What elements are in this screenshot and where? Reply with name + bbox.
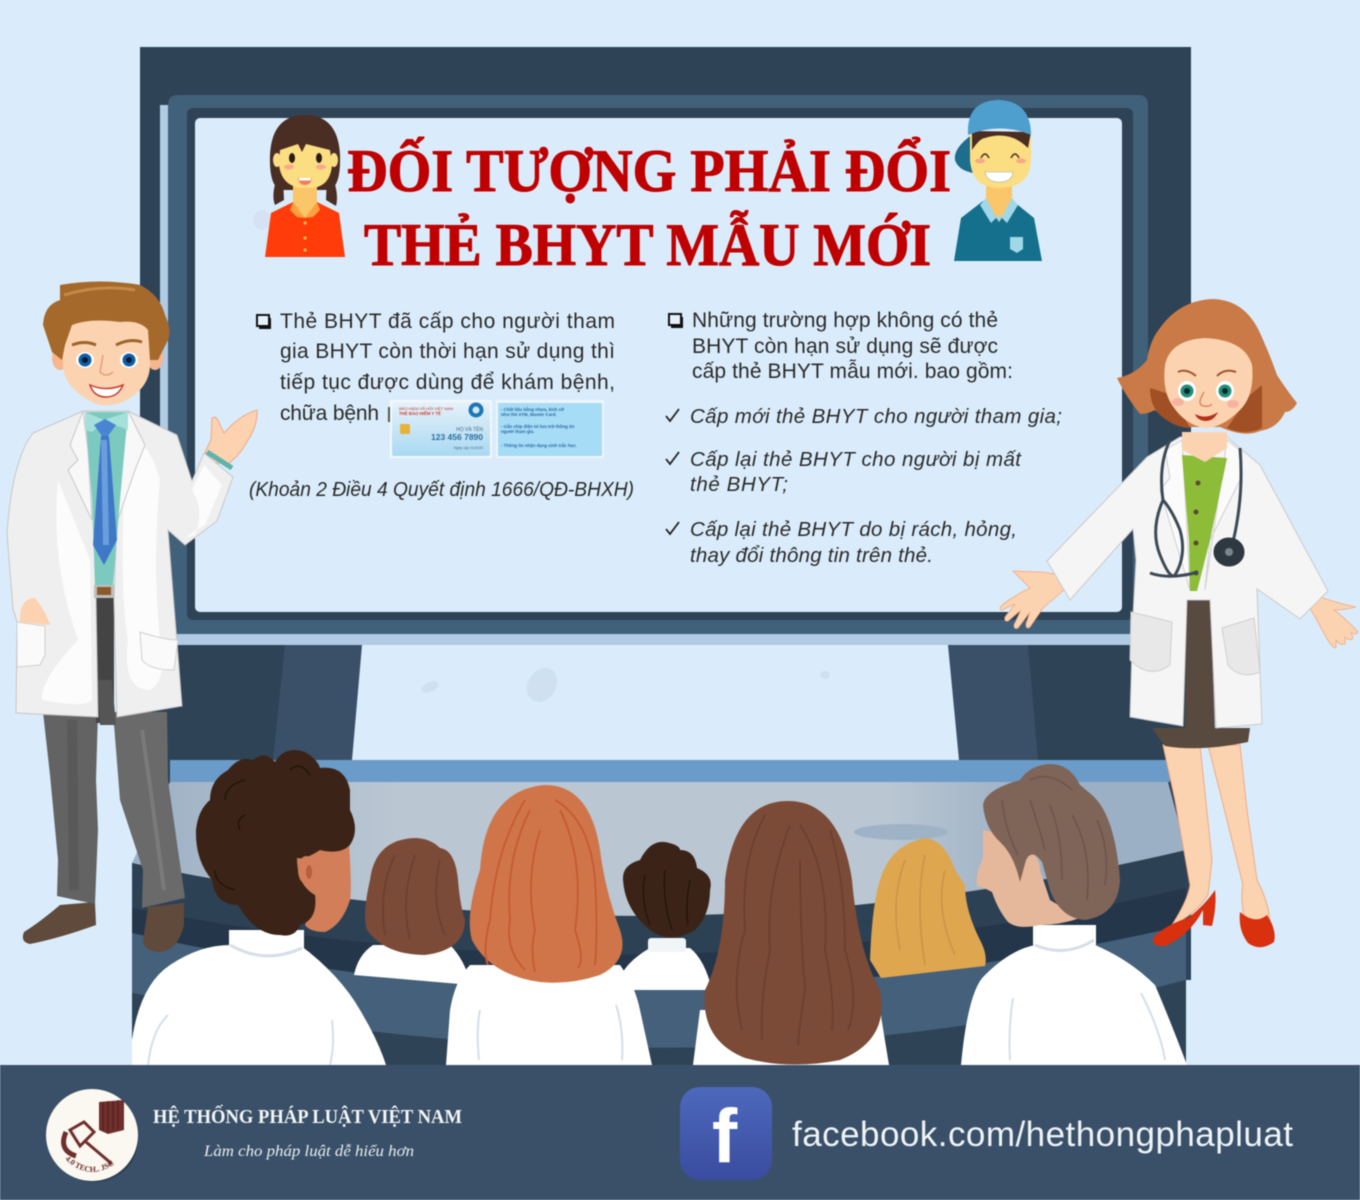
- intro paragraph: cấp thẻ BHYT mẫu mới. bao gồm:: [692, 360, 1013, 383]
- legal citation: (Khoản 2 Điều 4 Quyết định 1666/QĐ-BHXH): [249, 478, 634, 501]
- coat pockets: [1130, 612, 1260, 675]
- paragraph: gia BHYT còn thời hạn sử dụng thì: [280, 340, 615, 363]
- list item 3: Cấp lại thẻ BHYT do bị rách, hỏng,: [690, 518, 1017, 541]
- list item 3: [666, 518, 1017, 567]
- list item 3: thay đổi thông tin trên thẻ.: [690, 544, 933, 567]
- icon: insurance card back: - Chất liệu bằng nhựa, kích cỡ: [501, 407, 565, 412]
- icon: insurance card back: người tham gia.: [501, 429, 534, 434]
- title: [347, 138, 951, 278]
- organisation name: HỆ THỐNG PHÁP LUẬT VIỆT NAM: [153, 1104, 462, 1128]
- list item 2: thẻ BHYT;: [690, 473, 788, 496]
- paragraph: Thẻ BHYT đã cấp cho người tham: [280, 310, 615, 333]
- icon: girl avatar: [265, 115, 345, 257]
- icon: insurance card front: [390, 400, 492, 458]
- lab coat: [1047, 437, 1328, 728]
- icon: checkbox: [257, 315, 270, 328]
- intro paragraph: Những trường hợp không có thẻ: [692, 309, 998, 332]
- audience: blonde woman: [854, 824, 986, 978]
- icon: facebook: [680, 1087, 772, 1180]
- icon: checkbox: [669, 314, 682, 327]
- resting hand and pocket: [17, 598, 50, 667]
- icon: boy avatar: [954, 100, 1042, 261]
- list item 2: Cấp lại thẻ BHYT cho người bị mất: [690, 448, 1022, 471]
- hands: [1000, 571, 1358, 648]
- head and hair: [1117, 299, 1297, 434]
- stethoscope: [1150, 440, 1243, 576]
- head: [43, 282, 169, 406]
- icon: insurance card front: Ngày cấp 01/2020: [454, 446, 483, 450]
- red shoes: [1153, 890, 1275, 947]
- legs: [1163, 745, 1270, 925]
- male doctor: [7, 282, 257, 952]
- audience: long brown hair woman: [693, 801, 889, 1065]
- icon: insurance card back: - Gắn chip điện tử lưu trữ thông tin: [501, 424, 575, 429]
- lab coat: [7, 411, 233, 717]
- projection screen: [140, 47, 1191, 980]
- intro paragraph: [692, 309, 1013, 383]
- icon: insurance card back: như thẻ ATM, Master Card.: [501, 412, 557, 417]
- audience: grey-brown bun man: [961, 764, 1187, 1065]
- icon: insurance card front: THẺ BẢO HIỂM Y TẾ: [399, 411, 441, 416]
- icon: insurance card front: BẢO HIỂM XÃ HỘI VIỆT NAM: [399, 406, 453, 411]
- skirt: [1152, 591, 1250, 748]
- icon: insurance card back: - Thông tin nhận dạng sinh trắc học.: [501, 443, 577, 448]
- audience: short brown hair person: [354, 838, 471, 985]
- icon: insurance card back: [496, 400, 604, 458]
- audience: dark hair child: [616, 842, 712, 990]
- icon: insurance card front: 123 456 7890: [431, 432, 483, 442]
- list item 2: [666, 448, 1022, 496]
- footer bar: [0, 1064, 1360, 1200]
- shoes: [23, 902, 184, 952]
- logo badge: [45, 1088, 139, 1182]
- auditorium stage: [132, 760, 1186, 1065]
- intro paragraph: BHYT còn hạn sử dụng sẽ được: [692, 335, 998, 358]
- tagline: Làm cho pháp luật dễ hiểu hơn: [203, 1143, 414, 1160]
- title: ĐỐI TƯỢNG PHẢI ĐỔI: [347, 138, 951, 204]
- audience: curly hair man: [132, 750, 386, 1065]
- female doctor: [1000, 299, 1358, 947]
- icon: insurance card front: HỌ VÀ TÊN: [456, 425, 483, 433]
- list item 1: Cấp mới thẻ BHYT cho người tham gia;: [690, 405, 1062, 428]
- hands: [205, 410, 257, 468]
- logo badge: 4.0 TECH.. JSC: [65, 1156, 114, 1173]
- icon: facebook: f: [712, 1094, 738, 1179]
- paragraph: chữa bệnh: [280, 402, 379, 425]
- left text block: [249, 310, 634, 501]
- facebook address: facebook.com/hethongphapluat: [792, 1115, 1293, 1154]
- shirt and tie: [85, 412, 128, 598]
- audience: orange hair woman: [446, 785, 652, 1065]
- right text block: [666, 309, 1062, 567]
- trousers: [43, 598, 185, 908]
- green blouse: [1182, 432, 1227, 591]
- title: THẺ BHYT MẪU MỚI: [364, 211, 931, 278]
- paragraph: tiếp tục được dùng để khám bệnh,: [280, 371, 615, 394]
- paragraph: [280, 310, 615, 425]
